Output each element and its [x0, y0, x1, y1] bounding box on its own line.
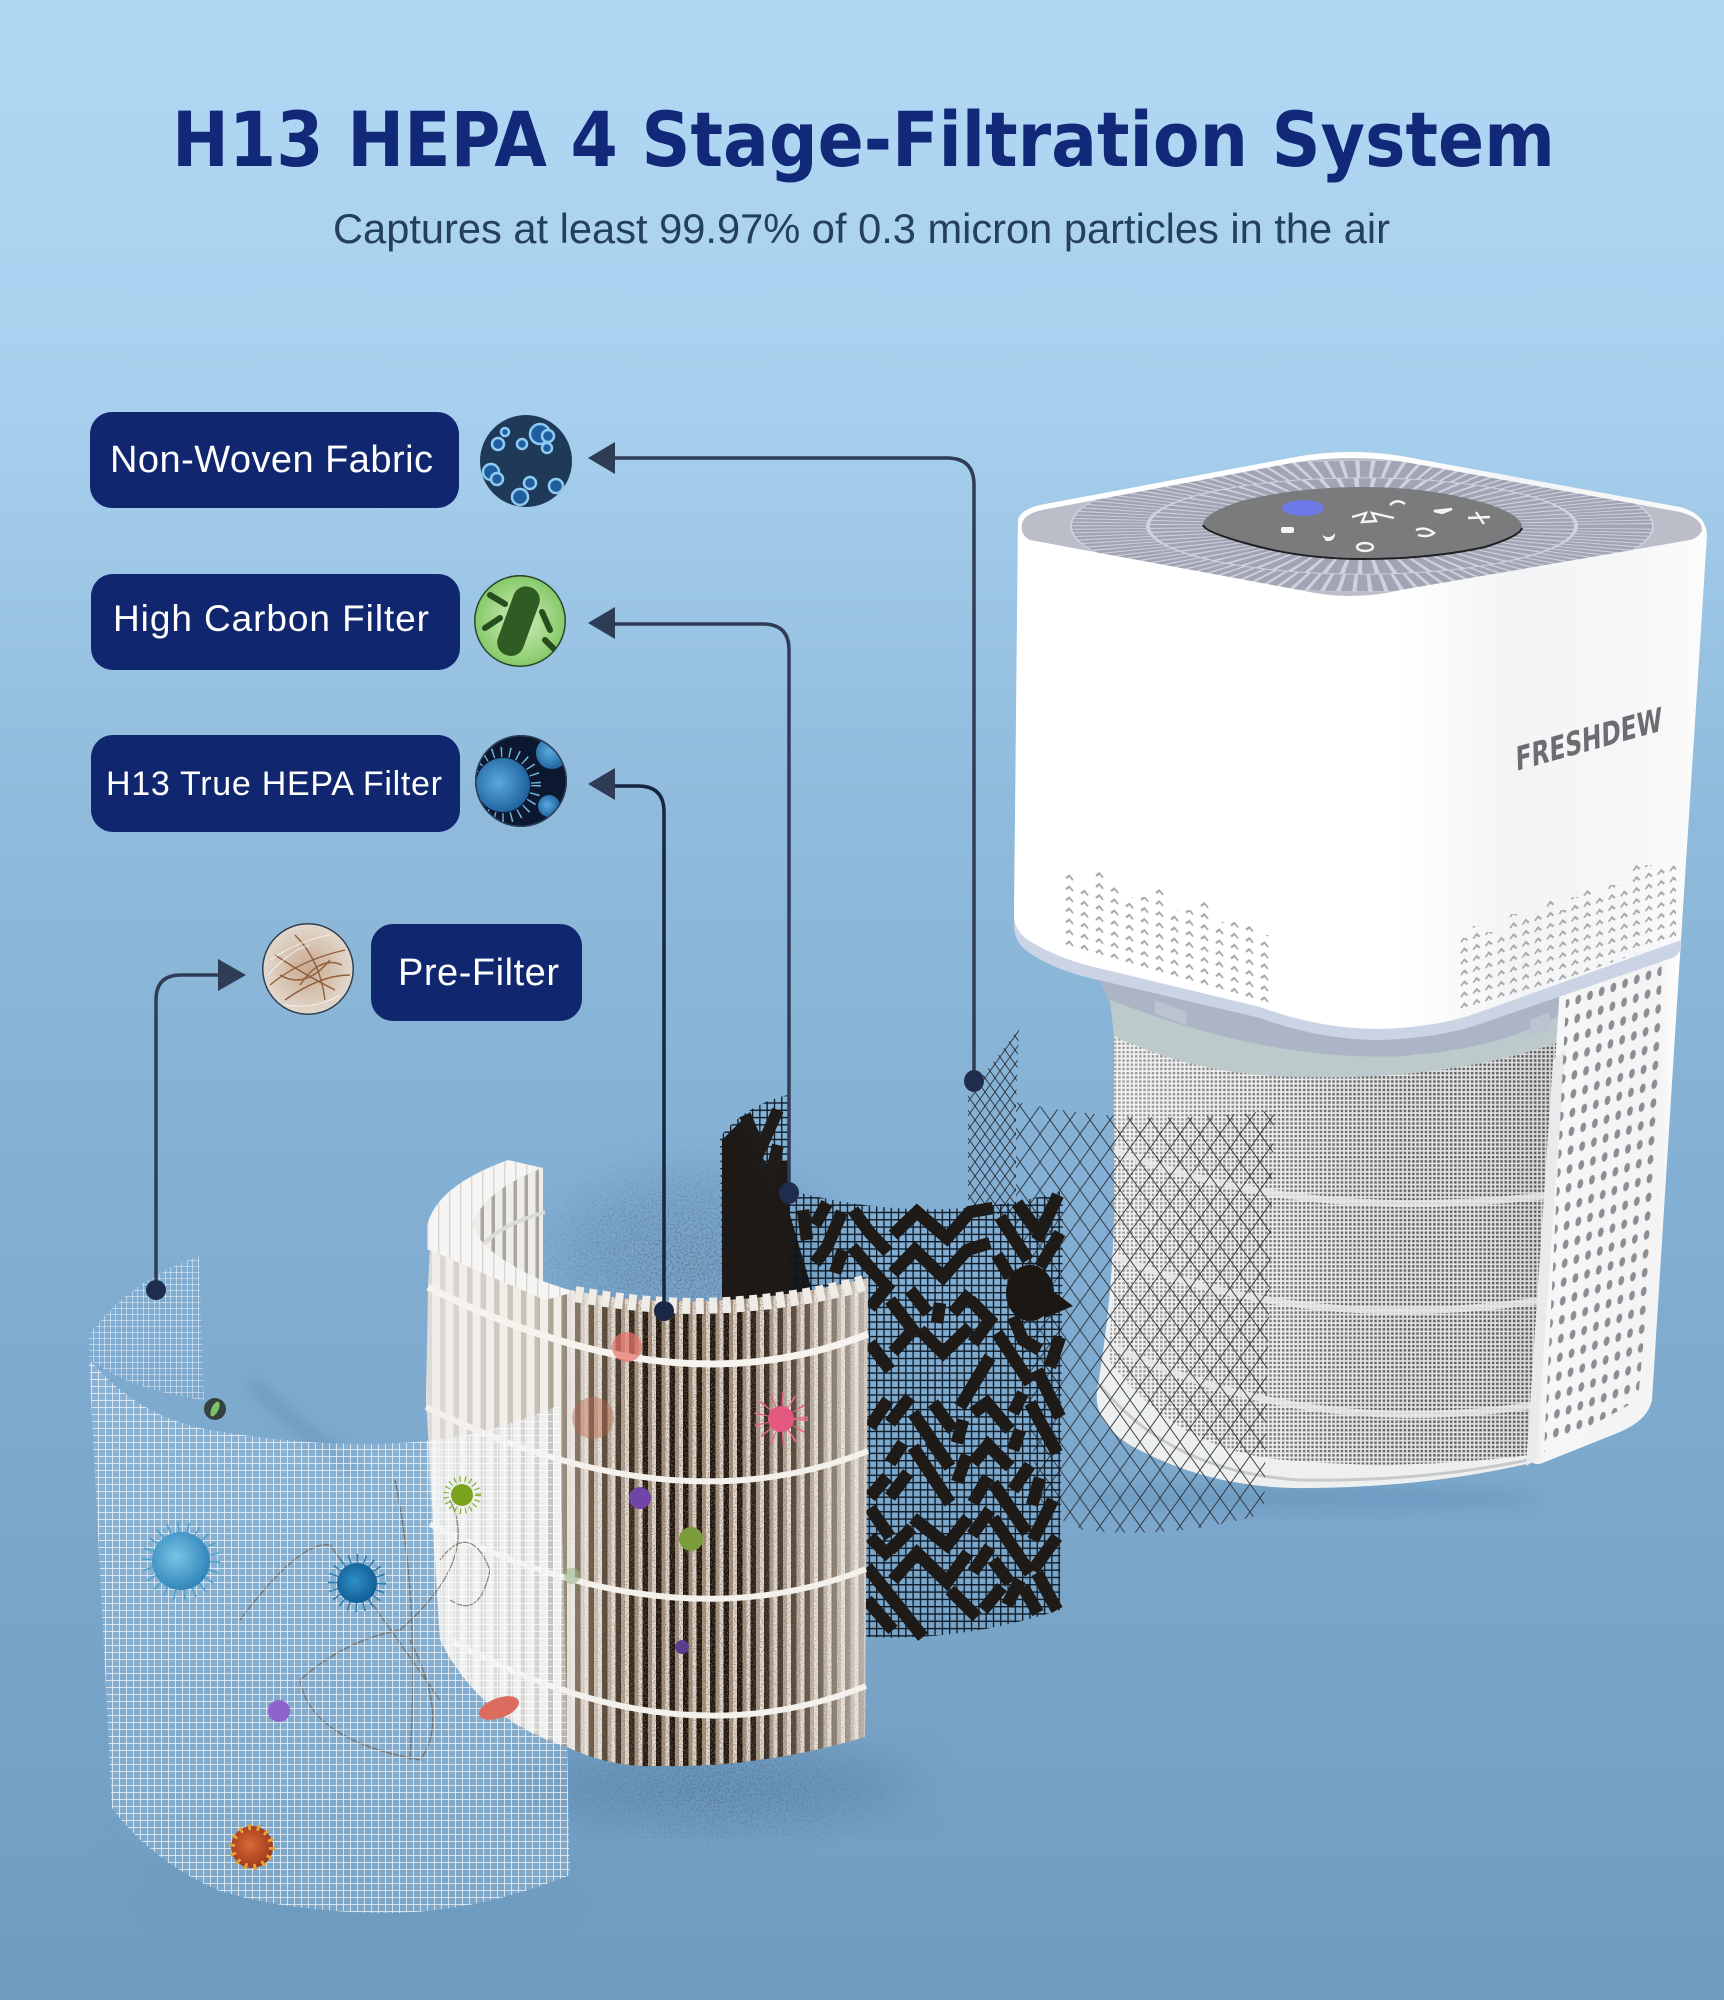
anchor dot	[146, 1280, 166, 1300]
label: High Carbon Filter	[91, 574, 460, 670]
big blue virus	[148, 1528, 214, 1594]
filter mesh cylinder	[1108, 1030, 1560, 1465]
leader line: high carbon filter	[588, 607, 799, 1204]
label: Non-Woven Fabric: Non-Woven Fabric	[110, 439, 433, 481]
carbon particle clump	[1006, 1265, 1054, 1321]
mesh back section	[968, 1028, 1019, 1220]
dirt speckle	[567, 1278, 868, 1766]
title: H13 HEPA 4 Stage-Filtration System	[172, 95, 1555, 184]
top gray surface	[1022, 458, 1702, 596]
control icons	[1352, 501, 1490, 551]
collar under head	[1092, 965, 1570, 1057]
control panel	[1203, 487, 1522, 559]
icon: blue viruses	[470, 734, 568, 828]
arrowhead	[218, 959, 246, 991]
arrowhead	[588, 768, 615, 800]
arrowhead	[588, 442, 615, 474]
brand logo: FRESHDEW	[1515, 700, 1663, 779]
icon: hair and dust	[261, 922, 355, 1016]
diamond non-woven mesh	[968, 1028, 1274, 1533]
carbon back section grid	[720, 1095, 815, 1300]
panel perforations	[1544, 950, 1662, 1452]
filter bands	[1110, 1150, 1552, 1414]
pre-filter mesh sheet	[89, 1256, 580, 1913]
panel bottom edge	[1203, 525, 1522, 559]
leader line: H13 true HEPA filter	[588, 768, 674, 1321]
carbon back zigzags	[745, 1110, 778, 1180]
dirt on pleats	[567, 1278, 868, 1766]
carbon zigzag granules	[803, 1195, 1060, 1637]
germs on HEPA filter	[572, 1332, 801, 1654]
collar clips	[1155, 1000, 1550, 1036]
rib 1	[428, 1287, 868, 1364]
air purifier	[1014, 452, 1707, 1488]
carbon grid sheet	[789, 1190, 1063, 1638]
light collar ring	[1110, 1000, 1566, 1077]
mesh front sheet	[1016, 1102, 1274, 1533]
label: Non-Woven Fabric	[90, 412, 459, 508]
floor shadows and dust clouds	[130, 1120, 1540, 1940]
purple germ	[268, 1700, 290, 1722]
label: H13 True HEPA Filter: H13 True HEPA Filter	[106, 765, 442, 803]
leader line: non-woven fabric	[588, 442, 984, 1092]
subtitle: Captures at least 99.97% of 0.3 micron particles in the air	[333, 205, 1390, 252]
label: Pre-Filter	[371, 924, 582, 1021]
serrated pleat tips	[575, 1282, 868, 1306]
HEPA pleated filter	[426, 1160, 876, 1770]
label: High Carbon Filter: High Carbon Filter	[113, 598, 429, 639]
faint green germ	[564, 1568, 580, 1584]
head lower band	[1014, 452, 1707, 1040]
side perforated panel	[1530, 940, 1681, 1464]
pink spiky germ	[761, 1399, 801, 1439]
rib 4	[450, 1640, 866, 1716]
green spiky germ	[446, 1479, 478, 1511]
grille rings	[1070, 460, 1654, 592]
icon: blue cells	[479, 414, 573, 508]
lock and moon icons	[1281, 527, 1335, 541]
filter shading	[1108, 1030, 1560, 1465]
small purple germ	[675, 1640, 689, 1654]
mesh back section	[89, 1256, 204, 1400]
rib 3	[430, 1524, 866, 1599]
filter cartridge base ring	[1097, 1020, 1560, 1488]
hair strands	[240, 1480, 490, 1760]
inner back wall	[473, 1168, 543, 1282]
label: Pre-Filter: Pre-Filter	[398, 952, 559, 994]
purple germ	[629, 1487, 651, 1509]
faded brown germ	[572, 1397, 614, 1439]
white top rim	[427, 1160, 575, 1300]
red virus	[231, 1826, 273, 1868]
green germ	[679, 1527, 703, 1551]
salmon bacterium	[476, 1691, 522, 1725]
right vent chevrons	[1458, 865, 1676, 1016]
anchor dot	[964, 1070, 984, 1092]
panel left lip	[1526, 1050, 1565, 1466]
rim fin lines	[427, 1160, 575, 1300]
arrowhead	[588, 607, 615, 639]
head white body	[1014, 452, 1707, 1029]
pleat bars	[426, 1247, 868, 1766]
left vent chevrons	[1062, 870, 1272, 1008]
pale red germ	[612, 1332, 642, 1362]
filter base ring shading	[1100, 1385, 1528, 1480]
icon: purple air quality indicator	[1282, 500, 1324, 516]
label: H13 True HEPA Filter	[91, 735, 460, 832]
clump tip	[1045, 1285, 1073, 1318]
blue virus	[333, 1559, 381, 1607]
pleats gap base	[426, 1247, 868, 1766]
black carbon filter	[720, 1095, 1073, 1638]
anchor dot	[654, 1301, 674, 1321]
icon: green bacteria	[473, 572, 567, 668]
leader line: pre-filter	[146, 959, 246, 1300]
mesh grid	[89, 1359, 570, 1913]
sheet tint	[89, 1359, 570, 1913]
carbon back dense fill	[722, 1112, 815, 1300]
anchor dot	[779, 1182, 799, 1204]
white veil over pleats	[426, 1405, 568, 1745]
inner back rib	[483, 1212, 545, 1245]
green pill germ	[204, 1398, 226, 1420]
rib 2	[426, 1407, 868, 1481]
